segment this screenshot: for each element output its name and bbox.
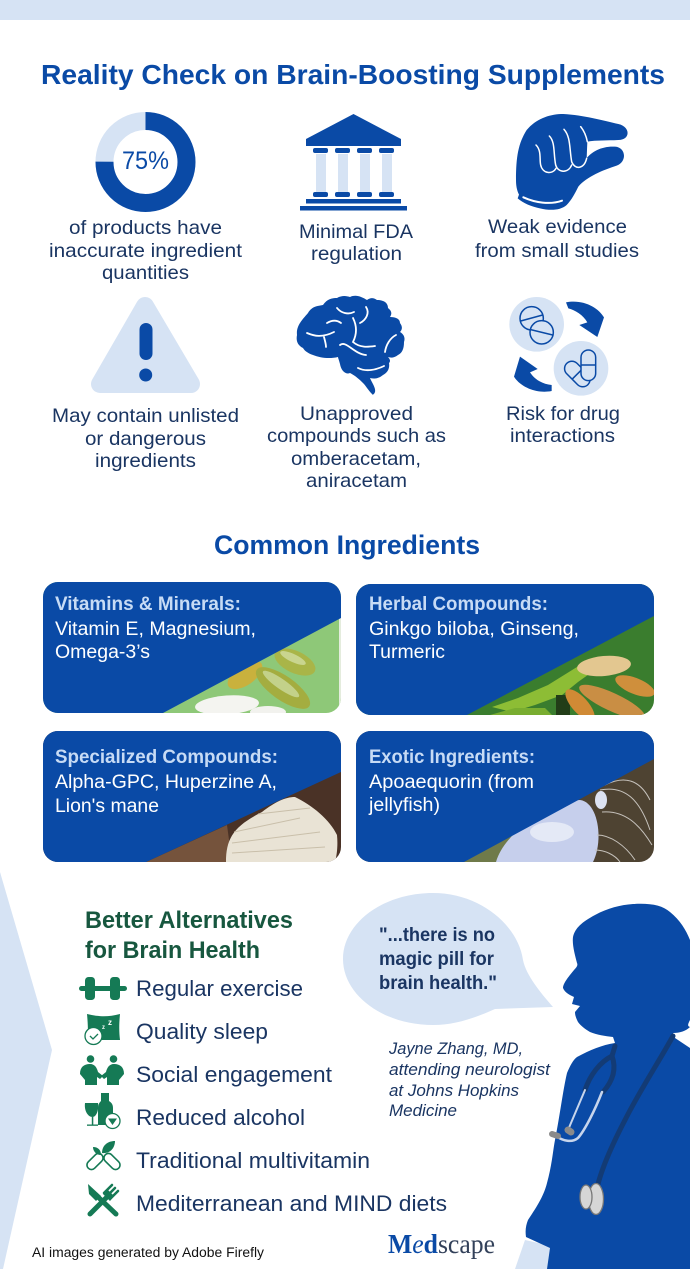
caption: Risk for drug [506, 403, 620, 425]
icon: brain [297, 296, 405, 395]
icon: government building [300, 114, 407, 210]
caption: aniracetam [306, 470, 407, 492]
item: mediterranean diet [88, 1184, 447, 1216]
item: mediterranean diet: Mediterranean and MIND diets [136, 1191, 447, 1216]
logo: Medscape: Medscape [388, 1229, 495, 1259]
caption: compounds such as [267, 425, 446, 447]
item: quality sleep [85, 1014, 268, 1044]
icon: pinching hand [516, 114, 628, 210]
card text: Vitamins & Minerals: [55, 594, 241, 615]
card text [55, 747, 278, 817]
caption [52, 405, 239, 472]
attribution: Medicine [389, 1102, 457, 1120]
caption [299, 221, 413, 265]
footer credit: AI images generated by Adobe Firefly [32, 1245, 264, 1260]
icon: warning triangle [100, 306, 191, 384]
panel: unapproved compounds [267, 296, 446, 492]
caption [506, 403, 620, 447]
attribution [388, 1040, 551, 1120]
card text: Ginkgo biloba, Ginseng, [369, 619, 579, 640]
icon: wine and bottle [85, 1093, 120, 1128]
caption: May contain unlisted [52, 405, 239, 427]
caption: Unapproved [300, 403, 413, 425]
icon: handshake [80, 1055, 124, 1085]
card text [368, 747, 535, 816]
caption: Weak evidence [488, 216, 627, 238]
photo: jellyfish [356, 731, 654, 862]
panel: exotic ingredients [356, 731, 654, 862]
attribution: attending neurologist [389, 1061, 551, 1079]
attribution: at Johns Hopkins [389, 1082, 519, 1100]
icon: pillow and clock: z [102, 1025, 105, 1031]
photo: vitamin capsules [43, 582, 341, 718]
photo: ginkgo and turmeric [356, 584, 657, 725]
caption: omberacetam, [291, 448, 421, 470]
card text: jellyfish) [368, 795, 440, 816]
chest piece [580, 1184, 604, 1214]
icon: fork and knife [88, 1184, 118, 1214]
caption: or dangerous [85, 428, 206, 450]
heading: better alternatives: for Brain Health [85, 937, 260, 964]
panel: drug interactions [506, 297, 620, 447]
figure [526, 904, 690, 1269]
icon: pillow and clock: z [108, 1018, 112, 1027]
card text: Alpha-GPC, Huperzine A, [55, 772, 277, 793]
item: reduced alcohol: Reduced alcohol [136, 1105, 305, 1130]
caption [49, 217, 243, 284]
panel: vitamins and minerals [43, 582, 341, 718]
item: social engagement [80, 1055, 332, 1087]
card text [55, 594, 256, 663]
list: alternatives [79, 976, 447, 1216]
panel: weak evidence [475, 114, 639, 262]
lab coat [515, 1240, 552, 1269]
doctor silhouette [515, 904, 690, 1269]
item: quality sleep: Quality sleep [136, 1019, 268, 1044]
card text: Exotic Ingredients: [369, 747, 535, 768]
heading: better alternatives [85, 907, 293, 964]
caption: quantities [102, 262, 189, 284]
panel: 75 percent inaccurate [49, 121, 243, 284]
card text: Herbal Compounds: [369, 594, 548, 615]
caption: of products have [69, 217, 222, 239]
caption: ingredients [95, 450, 196, 472]
panel: herbal compounds [356, 584, 657, 725]
caption: from small studies [475, 240, 639, 262]
heading: common ingredients: Common Ingredients [214, 530, 480, 560]
caption: inaccurate ingredient [49, 240, 243, 262]
panel: unlisted ingredients [52, 306, 239, 472]
card text [369, 594, 579, 663]
panel: specialized compounds [43, 731, 341, 862]
caption: regulation [311, 243, 402, 265]
left chevron background [0, 872, 52, 1269]
card text: Vitamin E, Magnesium, [55, 619, 256, 640]
card text: Apoaequorin (from [369, 772, 534, 793]
item: social engagement: Social engagement [136, 1062, 332, 1087]
item: reduced alcohol [85, 1093, 305, 1130]
item: traditional multivitamin [85, 1141, 370, 1173]
icon: pills and arrows [509, 297, 608, 396]
card text: Lion's mane [55, 796, 159, 817]
stethoscope [552, 1036, 673, 1184]
icon: donut chart: 75% [122, 147, 169, 175]
quote: brain health." [379, 973, 497, 994]
item: traditional multivitamin: Traditional multivitamin [136, 1148, 370, 1173]
quote [379, 925, 497, 994]
attribution: Jayne Zhang, MD, [388, 1040, 523, 1058]
heading: better alternatives: Better Alternatives [85, 907, 293, 934]
icon: dumbbell [79, 977, 127, 1000]
icon: pillow and clock [85, 1014, 120, 1044]
card text: Specialized Compounds: [55, 747, 278, 768]
caption [267, 403, 446, 492]
item: regular exercise: Regular exercise [136, 976, 303, 1001]
caption: interactions [510, 425, 615, 447]
top band [0, 0, 690, 20]
quote: "...there is no [379, 925, 495, 946]
icon: capsules and leaf [85, 1141, 122, 1171]
quote: magic pill for [379, 949, 495, 970]
speech bubble [343, 893, 553, 1025]
caption: Minimal FDA [299, 221, 413, 243]
panel: FDA regulation [299, 114, 413, 265]
caption [475, 216, 639, 262]
icon: donut chart [104, 121, 186, 203]
card text: Omega-3’s [55, 642, 150, 663]
photo: lion's mane mushroom [43, 731, 341, 862]
card text: Turmeric [369, 642, 445, 663]
title: Reality Check on Brain-Boosting Supplements [41, 59, 665, 90]
